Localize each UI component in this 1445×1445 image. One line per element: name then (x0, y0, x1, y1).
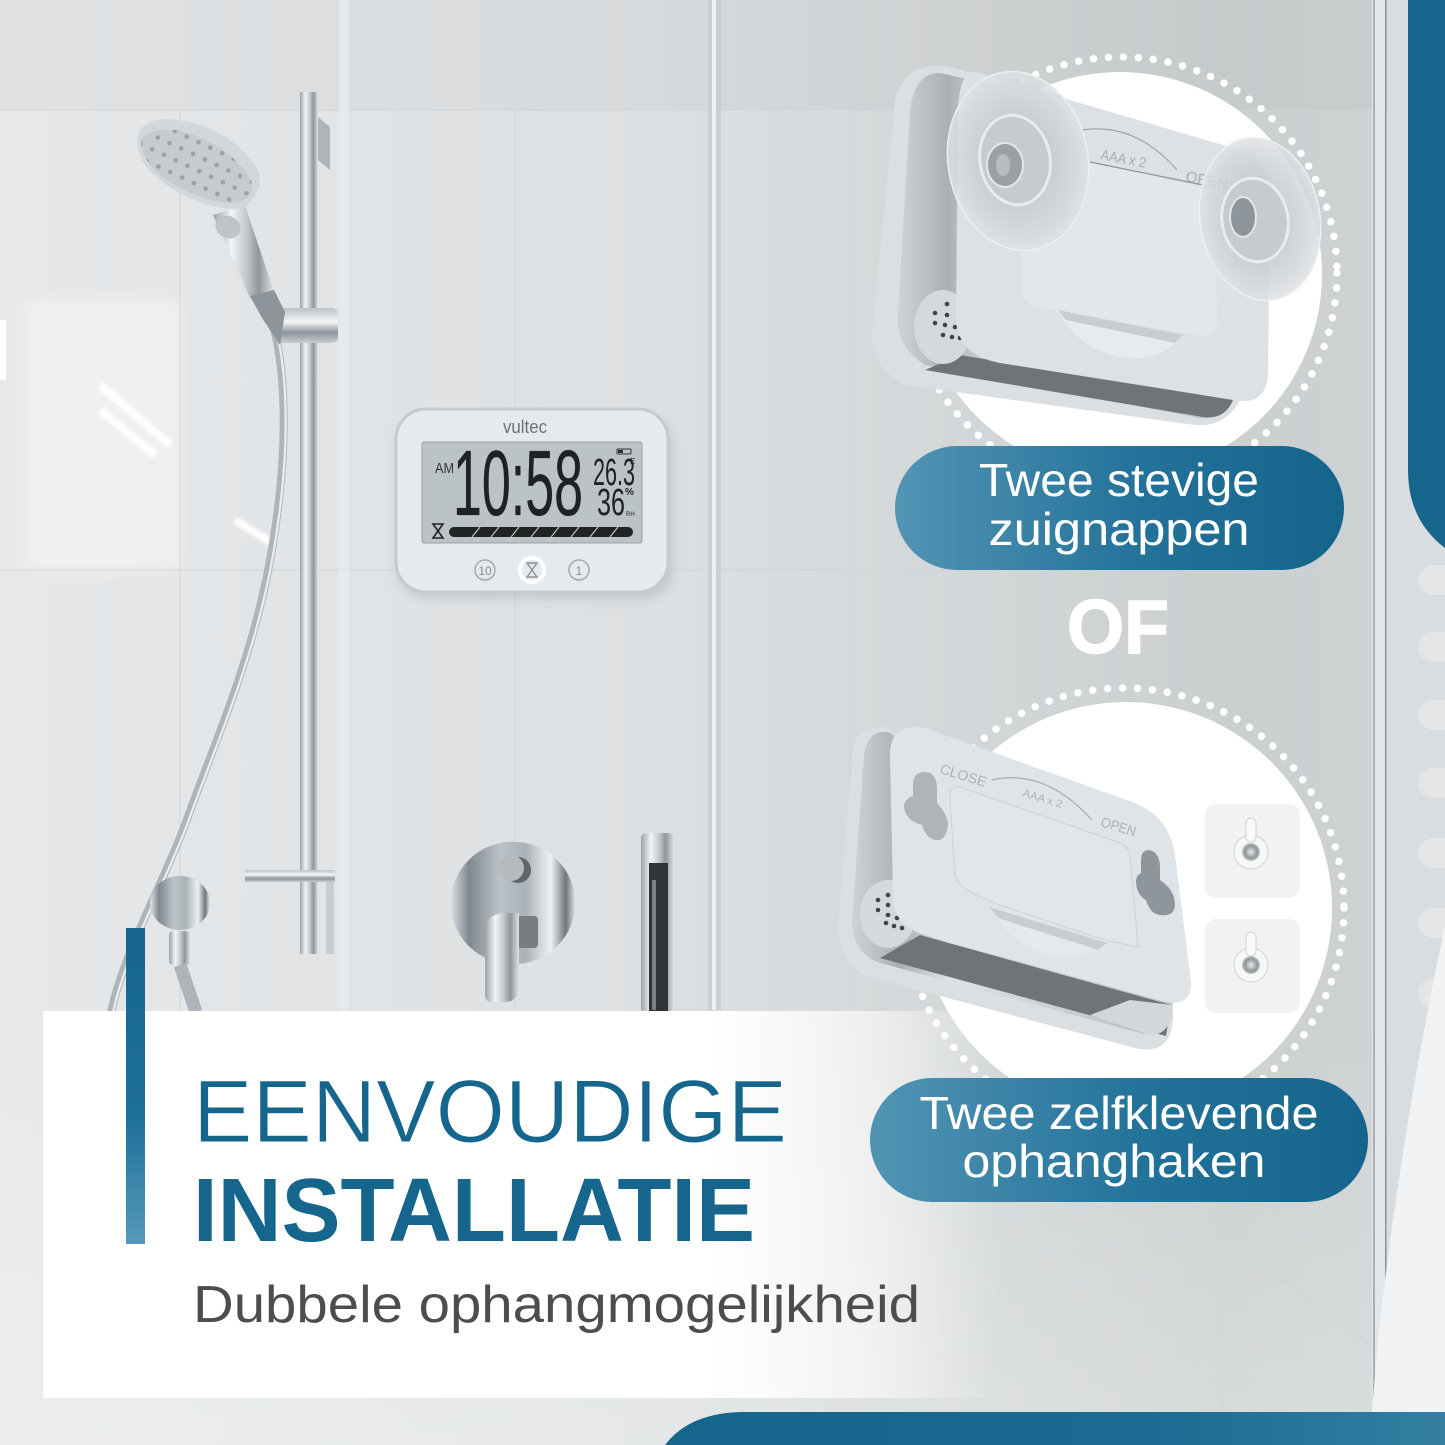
temperature readout: 26.3 (593, 452, 635, 494)
temperature unit: E (630, 457, 635, 466)
label pill: suction cups: zuignappen (988, 503, 1250, 555)
battery label: AAA x 2 (1021, 787, 1064, 811)
white circle (920, 702, 1332, 1114)
label pill: adhesive hooks: ophanghaken (962, 1135, 1266, 1187)
button: timer (520, 558, 544, 582)
door handle (641, 833, 674, 1013)
button: 1 (569, 560, 589, 580)
keyhole left (904, 772, 948, 840)
product: clock on wall (396, 409, 668, 592)
white circle (918, 72, 1322, 476)
clock back view (872, 66, 1270, 425)
clock time readout: 10:58 (453, 431, 583, 535)
clock shadow (398, 418, 672, 598)
corner accent: bottom (665, 1412, 1445, 1445)
clock back view (838, 727, 1191, 1049)
icon: shower head (137, 119, 285, 345)
title line 1: EENVOUDIGE (193, 1061, 787, 1161)
dotted ring (905, 57, 1337, 489)
label pill: adhesive hooks: Twee zelfklevende (920, 1087, 1318, 1139)
brand logo: vultec (503, 417, 547, 437)
arrow label: AAA x 2 (1099, 146, 1148, 171)
panel: suction cup option (872, 57, 1337, 489)
button: 10: 10 (478, 564, 492, 578)
adhesive hook top (1205, 804, 1300, 898)
accent bar (126, 928, 145, 1244)
suction cup right (1187, 128, 1333, 310)
suction cup left (933, 60, 1103, 262)
adhesive hook bottom (1205, 919, 1300, 1013)
towel (1372, 925, 1445, 1412)
panel: adhesive hook option (838, 688, 1344, 1128)
open label: OPEN (1099, 814, 1138, 839)
button: 10 (475, 560, 495, 580)
corner accent: top right (1408, 0, 1445, 548)
shower mixer valve (450, 841, 576, 1002)
close label: CLOSE (938, 761, 989, 790)
back plate (890, 727, 1191, 1003)
divider word: OF: OF (1067, 585, 1169, 670)
relative humidity label: RH (626, 512, 635, 518)
AM label: AM (435, 460, 454, 477)
label pill: adhesive hooks (870, 1078, 1368, 1202)
humidity readout: 36 (597, 482, 625, 524)
keyhole right (1136, 850, 1175, 915)
title line 2: INSTALLATIE (193, 1161, 755, 1261)
label pill: suction cups (895, 446, 1344, 570)
clock back view: OPEN (1184, 168, 1229, 193)
towel rail rods (1418, 565, 1445, 1008)
dotted ring (904, 688, 1344, 1128)
panel: white title background (43, 1011, 1000, 1398)
shower rail and hose (111, 92, 338, 1012)
back plate (956, 72, 1270, 401)
subtitle: Dubbele ophangmogelijkheid (193, 1276, 920, 1334)
icon: hourglass (433, 524, 443, 538)
humidity unit: % (625, 487, 634, 498)
icon: battery (617, 449, 631, 454)
label pill: suction cups: Twee stevige (979, 454, 1259, 506)
timer progress bar (449, 527, 633, 537)
button: 1: 1 (576, 564, 583, 578)
